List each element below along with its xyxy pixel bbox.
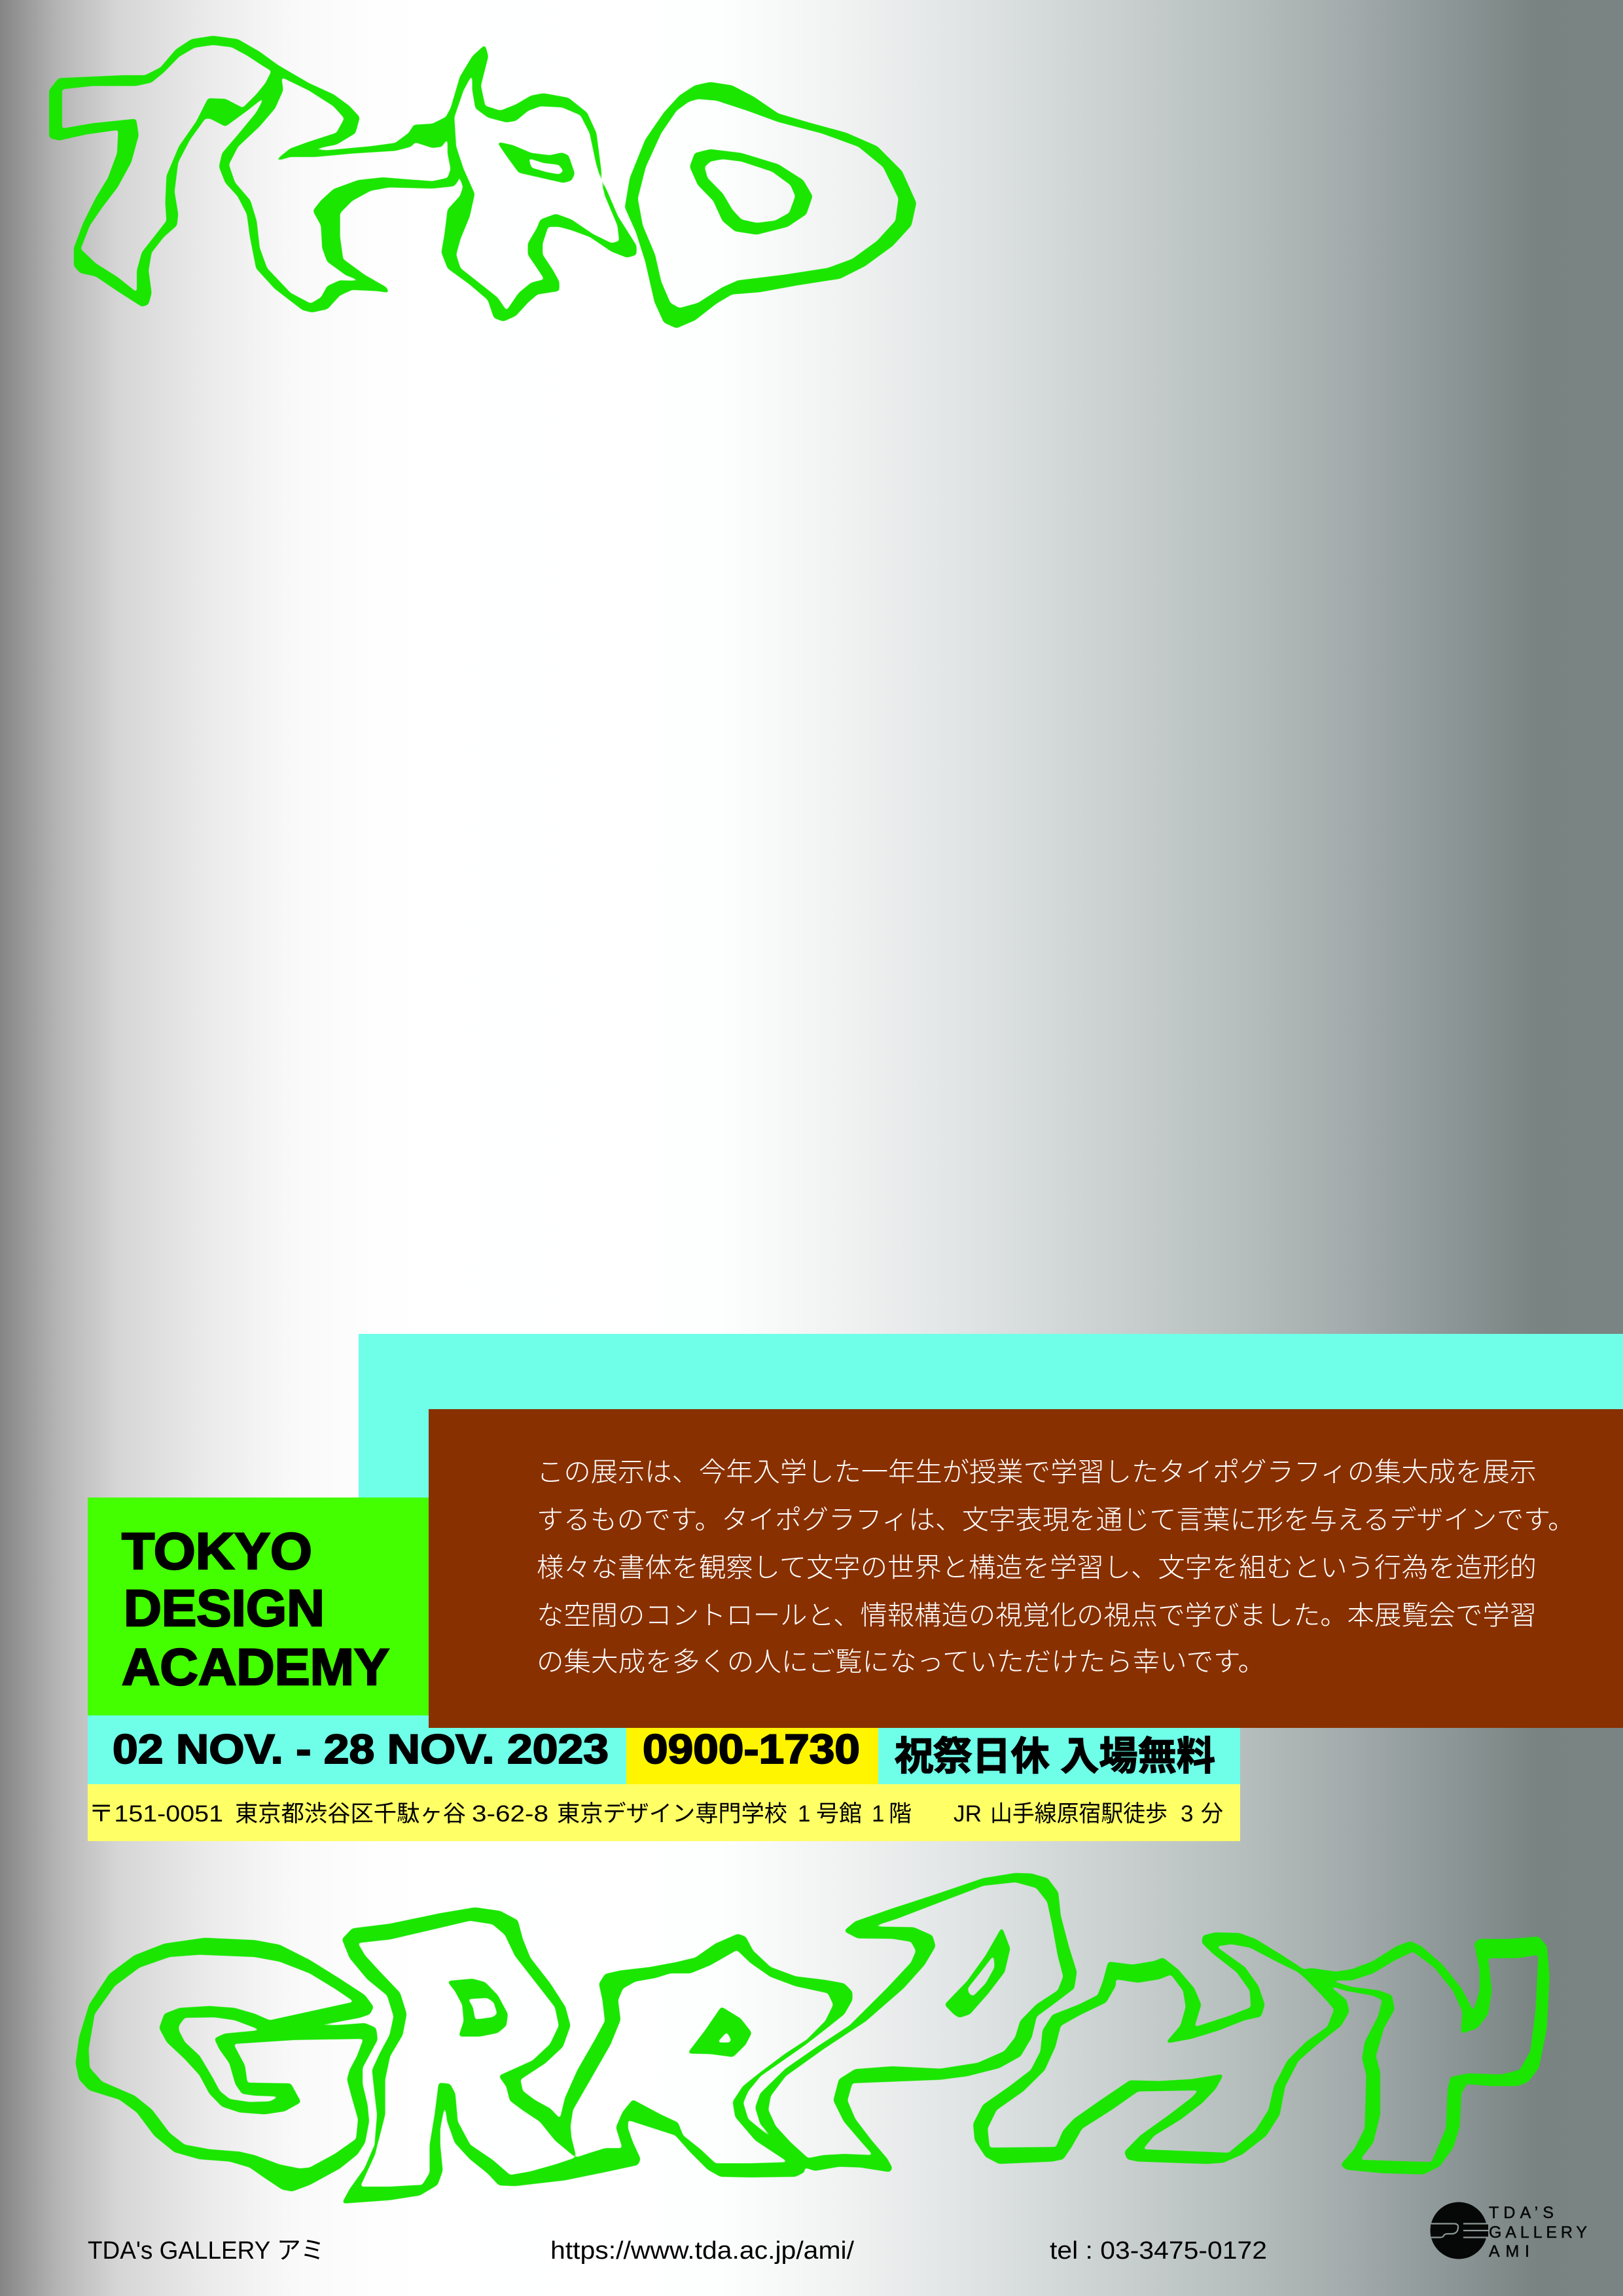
access text — [954, 1801, 1223, 1827]
panel: brown description block — [429, 1409, 1623, 1728]
description text line 5: の集大成を多くの人にご覧になっていただけたら幸いです。 — [537, 1647, 1265, 1677]
description text line 4: な空間のコントロールと、情報構造の視覚化の視点で学びました。本展覧会で学習 — [537, 1600, 1537, 1630]
closed days and free admission text: 祝祭日休 入場無料 — [895, 1734, 1215, 1778]
logo mark — [1429, 2202, 1489, 2259]
address text: 階 — [889, 1801, 912, 1827]
panel: pale yellow address strip — [88, 1784, 1240, 1841]
access text: 分 — [1201, 1801, 1223, 1827]
description text line 1: この展示は、今年入学した一年生が授業で学習したタイポグラフィの集大成を展示 — [537, 1457, 1537, 1487]
address text: 1 — [798, 1801, 810, 1827]
address text: 号館 — [816, 1801, 862, 1827]
logo: TDA's Gallery Ami — [1429, 2202, 1587, 2261]
address text: 東京都渋谷区千駄ヶ谷 — [235, 1801, 466, 1827]
logo text: AMI: AMI — [1489, 2242, 1529, 2261]
opening hours text: 0900-1730 — [643, 1727, 860, 1772]
address text — [88, 1801, 912, 1827]
description text line 3: 様々な書体を観察して文字の世界と構造を学習し、文字を組むという行為を造形的 — [537, 1552, 1537, 1583]
footer: telephone: tel : 03-3475-0172 — [1050, 2237, 1267, 2265]
access text: 3 — [1181, 1801, 1193, 1827]
address text: 東京デザイン専門学校 — [557, 1801, 787, 1827]
heading: TOKYO: TOKYO — [122, 1522, 312, 1580]
panel: green title block — [88, 1498, 429, 1715]
logo text: GALLERY: GALLERY — [1489, 2223, 1587, 2242]
access text: 山手線原宿駅徒歩 — [990, 1801, 1168, 1827]
panel: yellow hours strip — [626, 1727, 878, 1784]
panel: cyan closed days strip — [878, 1728, 1240, 1784]
lettering artwork: GRAPHY — [76, 1873, 1550, 2215]
heading: ACADEMY: ACADEMY — [122, 1638, 389, 1696]
footer: gallery name: TDA's GALLERY アミ — [88, 2237, 325, 2265]
footer: website url: https://www.tda.ac.jp/ami/ — [550, 2237, 854, 2265]
panel: cyan date strip — [88, 1715, 626, 1784]
address text: 1 — [872, 1801, 884, 1827]
access text: JR — [954, 1801, 982, 1827]
logo text: TDA'S: TDA’S — [1489, 2204, 1554, 2222]
address text: 〒151-0051 — [88, 1801, 223, 1827]
date text: 02 NOV. - 28 NOV. 2023 — [113, 1727, 609, 1772]
description text line 2: するものです。タイポグラフィは、文字表現を通じて言葉に形を与えるデザインです。 — [537, 1505, 1575, 1535]
panel: cyan backing block — [359, 1334, 1623, 1498]
address text: 3-62-8 — [472, 1801, 548, 1827]
heading: DESIGN: DESIGN — [124, 1579, 325, 1637]
